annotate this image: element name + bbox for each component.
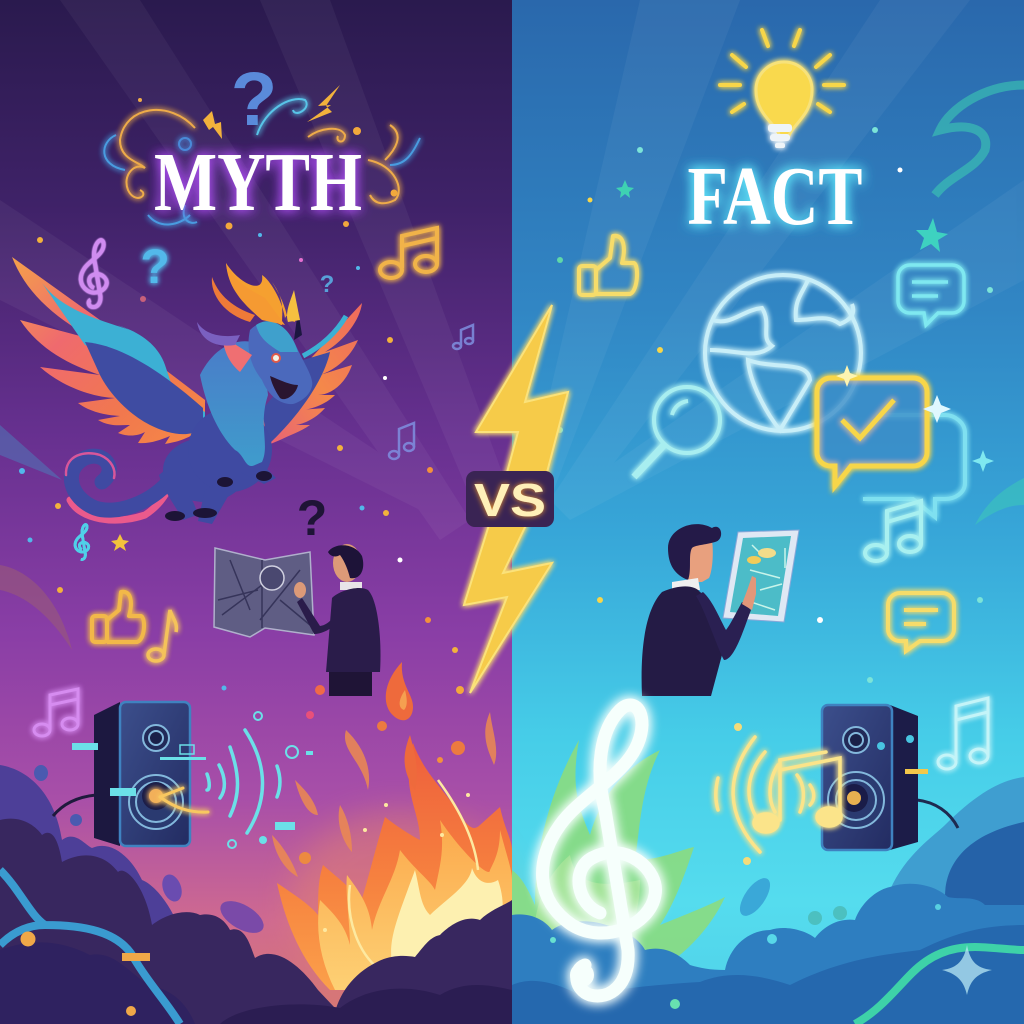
icon: light bulb xyxy=(720,30,844,148)
badge: VS xyxy=(466,471,554,527)
floating flame wisps xyxy=(272,662,496,877)
far right cloud xyxy=(850,777,1024,1024)
decorative green ribbon xyxy=(935,85,1024,195)
crumpled map xyxy=(214,548,314,637)
background rays xyxy=(0,0,1024,540)
decorative swirls xyxy=(104,99,420,224)
cable xyxy=(53,795,96,816)
icon: neon chat bubble top right xyxy=(898,265,964,325)
cyan dashes xyxy=(72,743,313,830)
speaker cones xyxy=(129,725,183,829)
dragon head xyxy=(197,310,312,404)
gold sound waves and note xyxy=(716,737,841,852)
speaker accents xyxy=(734,723,928,865)
foreground right cloud xyxy=(333,900,512,1024)
icon: neon question mark: ? xyxy=(140,241,170,294)
lightning bolt lower xyxy=(464,525,552,693)
sparkle star xyxy=(942,945,992,995)
dragon mane xyxy=(200,341,268,466)
title dots xyxy=(138,98,398,237)
question mark above person: ? xyxy=(297,490,327,546)
path markers xyxy=(20,932,150,1016)
icon: gold chat bubble with check xyxy=(817,378,927,486)
icon: neon treble clef left xyxy=(81,240,107,307)
dragon left wing feathers xyxy=(12,257,205,444)
inner flames xyxy=(391,868,503,979)
clouds: fact side xyxy=(512,777,1024,1024)
icon: faint music notes xyxy=(389,325,473,459)
illustration: fire xyxy=(272,662,512,990)
illustration: person with tablet xyxy=(642,524,799,696)
illustration: person with map xyxy=(214,490,380,696)
illustration: winged dragon xyxy=(12,257,362,524)
dragon claws xyxy=(165,471,272,521)
dark front cloud xyxy=(220,985,512,1024)
icon: neon pink notes xyxy=(34,689,78,736)
person body xyxy=(294,544,380,696)
sparkle dots and stars: fact side xyxy=(557,127,993,683)
glow and sound waves xyxy=(149,712,298,848)
main blue cloud xyxy=(512,884,1024,1024)
dark right cloud xyxy=(900,822,1024,1024)
blue winding path xyxy=(0,870,180,1024)
cloud dots xyxy=(550,873,941,1009)
illustration: right speaker xyxy=(716,705,958,865)
background: myth side xyxy=(0,0,512,1024)
badge: VS: VS xyxy=(474,474,546,526)
clouds: myth side xyxy=(0,765,512,1024)
dragon flame mane xyxy=(212,263,300,325)
lower violet band xyxy=(0,942,195,1024)
fire glow xyxy=(290,810,510,990)
sparkle dots: myth side xyxy=(19,237,458,763)
speaker cabinet xyxy=(890,705,918,850)
flame highlight strokes xyxy=(349,780,478,968)
illustration: large treble clef xyxy=(543,705,655,996)
lower dark cloud xyxy=(512,925,1024,1024)
icon: small clef and star xyxy=(75,525,129,560)
icon: neon globe xyxy=(705,275,861,431)
dragon body and legs xyxy=(159,408,276,524)
heading: FACT: FACT xyxy=(688,150,862,243)
icon: neon magnifying glass xyxy=(634,387,720,477)
cable xyxy=(917,800,958,828)
heading: MYTH: MYTH xyxy=(154,136,362,229)
icon: outline chat bubble xyxy=(863,415,965,517)
icon: neon thumbs up right xyxy=(579,236,637,295)
icon: neon single note xyxy=(148,610,176,661)
illustration: left speaker xyxy=(53,702,313,848)
myth side: glowing title cluster xyxy=(104,57,420,237)
icon: neon gold chat bubble xyxy=(888,593,954,651)
icon: neon notes teal xyxy=(865,501,921,561)
dragon tail xyxy=(66,453,172,520)
icon: small lightning bolts xyxy=(203,85,340,139)
cloud puffs xyxy=(34,765,269,939)
mid flames xyxy=(318,820,512,990)
icon: faint notes right xyxy=(938,698,988,769)
small embers xyxy=(299,685,470,932)
small question marks near dragon: ? xyxy=(320,271,334,298)
teal glowing path xyxy=(855,947,1024,1024)
person body xyxy=(642,524,756,696)
icon: question mark: ? xyxy=(231,57,277,142)
speaker cones xyxy=(828,727,884,828)
dragon left wing teal edge xyxy=(40,280,205,428)
dragon left wing blue inner xyxy=(85,342,203,434)
dragon right wing inner xyxy=(262,316,346,445)
outer flames xyxy=(277,743,512,990)
dragon right wing feathers xyxy=(262,303,362,445)
speaker cabinet xyxy=(94,702,120,846)
illustration: green flames behind clef xyxy=(512,740,725,975)
background wisps xyxy=(0,425,1024,650)
far cloud xyxy=(0,765,178,1024)
lightning bolt upper xyxy=(476,305,568,480)
icon: neon music note gold xyxy=(380,228,437,278)
background: fact side xyxy=(512,0,1024,1024)
tablet xyxy=(723,530,799,622)
icon: neon thumbs up left xyxy=(92,592,144,642)
main cloud mass xyxy=(0,819,350,1024)
icon: sparkles xyxy=(836,365,994,472)
